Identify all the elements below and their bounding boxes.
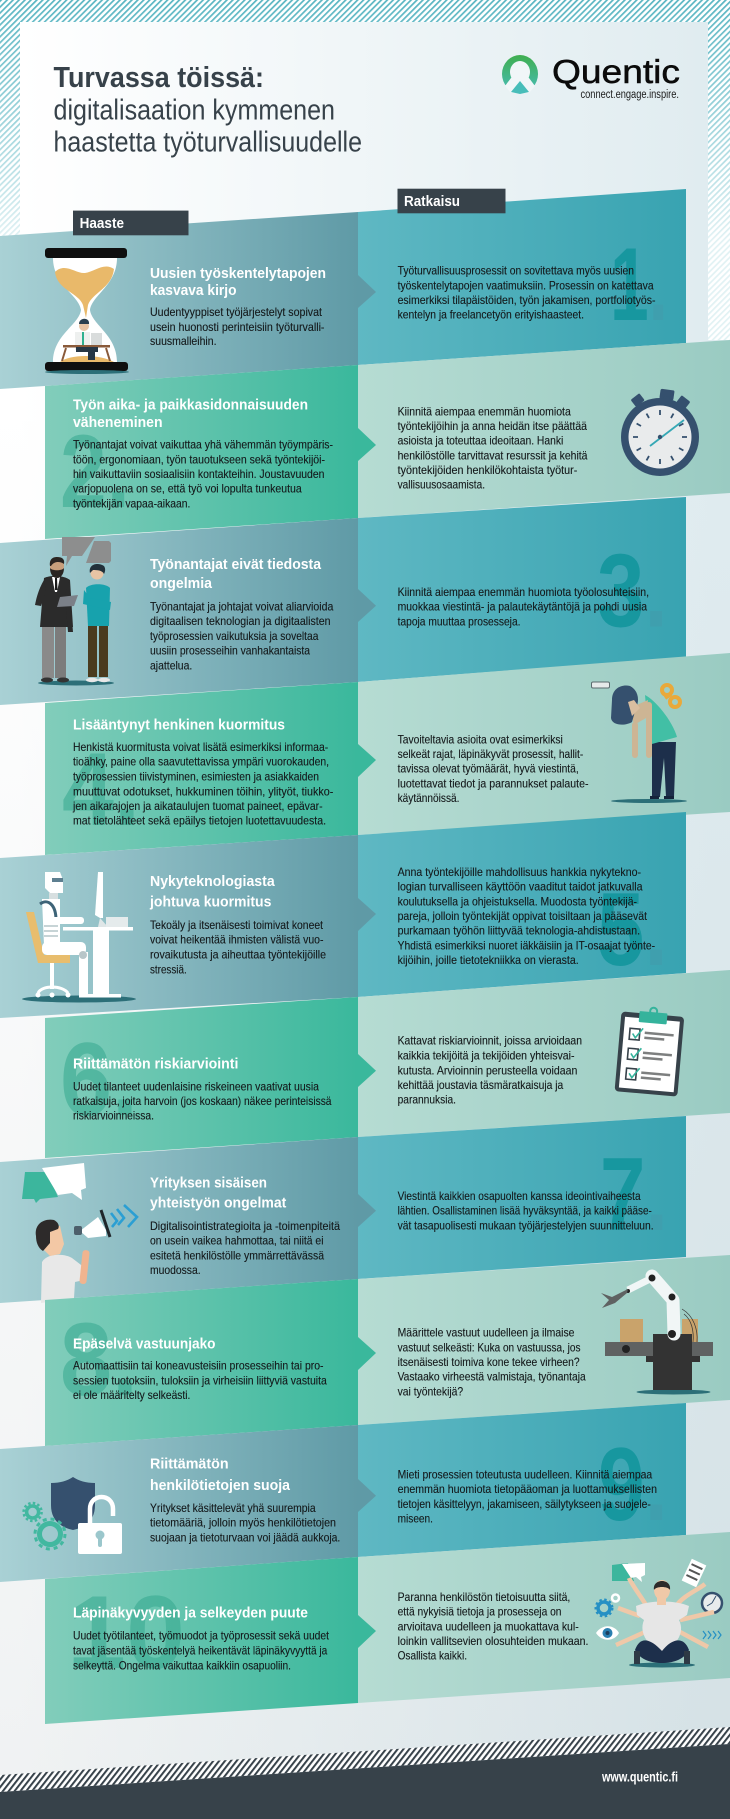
text: solution 7: Viestintä kaikkien osapuolten kanssa ideointivaiheesta: [398, 1189, 641, 1203]
text: challenge 10: Uudet työtilanteet, työmuodot ja työprosessit sekä uudet: [73, 1628, 330, 1642]
number 6: 6.: [60, 1022, 138, 1138]
text: solution 9: Mieti prosessien toteutusta uudelleen. Kiinnitä aiempaa: [398, 1467, 652, 1481]
icon: robot at desk: [22, 872, 136, 1002]
text: challenge 7: [150, 1219, 340, 1277]
text: solution 7: lähtien. Osallistaminen lisää hyväksyntää, ja kaikki pääse-: [398, 1204, 652, 1218]
text: solution 1: Työturvallisuusprosessit on sovitettava myös uusien: [398, 264, 634, 278]
row 8: [45, 1255, 730, 1446]
text: solution 4: tavissa olevat työmäärät, hyvä viestintä,: [398, 762, 579, 776]
heading: challenge 9: henkilötietojen suoja: [150, 1478, 291, 1494]
text: solution 6: parannuksia.: [398, 1093, 456, 1107]
icon: stopwatch: [621, 389, 699, 476]
text: challenge 3: digitaalisen teknologian ja digitaalisten: [150, 614, 330, 628]
title: digitalisaation kymmenen: [54, 94, 335, 126]
text: solution 9: enemmän huomiota tietopääoman ja luottamuksellisten: [398, 1482, 657, 1496]
heading: challenge 1: Uusien työskentelytapojen: [150, 266, 326, 282]
text: challenge 4: työprosessien tiivistyminen, esimiesten ja asiakkaiden: [73, 770, 319, 784]
text: solution 10: Osallista kaikki.: [398, 1649, 467, 1663]
heading: challenge 9: [150, 1456, 291, 1494]
text: challenge 7: Digitalisointistrategioita ja -toimenpiteitä: [150, 1219, 340, 1233]
text: solution 10: Paranna henkilöstön tietoisuutta siitä,: [398, 1590, 570, 1604]
logo: Quentic: Quentic: [552, 53, 680, 90]
text: challenge 5: [150, 918, 326, 976]
text: challenge 8: Automaattisiin tai koneavusteisiin prosesseihin tai pro-: [73, 1359, 324, 1373]
number 8: 8.: [60, 1302, 138, 1418]
text: solution 7: vät tasapuolisesti mukaan työjärjestelyjen suunnitteluun.: [398, 1218, 654, 1232]
row 10: [45, 1532, 730, 1724]
number 1: 1.: [610, 227, 668, 343]
number 9: 9.: [598, 1427, 668, 1543]
title: haastetta työturvallisuudelle: [54, 127, 362, 159]
text: solution 5: logian turvalliseen käyttöön vaaditut taidot jatkuvalla: [398, 880, 643, 894]
text: challenge 2: [73, 438, 333, 510]
text: solution 1: esimerkiksi tilapäistöiden, työn jakamisen, portfoliotyös-: [398, 293, 656, 307]
text: challenge 2: työntekijän vapaa-aikaan.: [73, 496, 190, 510]
text: solution 6: kutusta. Arvioinnin perusteella voidaan: [398, 1063, 577, 1077]
text: challenge 2: töön, ergonomiaan, työn tauotukseen sekä työntekijöi-: [73, 452, 325, 466]
text: solution 6: kaikkia tekijöitä ja tekijöiden yhteisvai-: [398, 1049, 574, 1063]
icon: person with megaphone: [22, 1163, 137, 1303]
footer: [0, 1727, 730, 1819]
text: challenge 4: jen aikarajojen ja aikataulujen tuomat paineet, epävar-: [72, 799, 323, 813]
text: solution 2: henkilöstölle tarvittavat resurssit ja kehitä: [398, 448, 588, 462]
text: challenge 1: suusmalleihin.: [150, 334, 216, 348]
text: solution 2: työntekijöiden henkilökohtaista työtur-: [398, 463, 577, 477]
text: challenge 9: Yritykset käsittelevät yhä suurempia: [150, 1501, 316, 1515]
text: solution 1: työskentelytapojen vaatimuksiin. Prosessin on katettava: [398, 278, 654, 292]
text: solution 5: pareja, jolloin työntekijät oppivat toisiltaan ja pääsevät: [398, 909, 648, 923]
text: solution 8: vai työntekijä?: [398, 1384, 463, 1398]
text: challenge 8: [73, 1359, 327, 1402]
text: challenge 3: työprosessien vaikutuksia ja soveltaa: [150, 629, 319, 643]
text: challenge 9: tietomääriä, jolloin myös henkilötietojen: [150, 1516, 336, 1530]
text: challenge 4: [72, 740, 333, 828]
text: solution 6: [398, 1034, 582, 1107]
text: challenge 2: hin vaikuttaviin sosiaalisiin kontakteihin. Joustavuuden: [73, 467, 324, 481]
text: challenge 6: [73, 1079, 332, 1123]
icon: hourglass: [45, 248, 129, 374]
row 5: [0, 812, 686, 1018]
text: solution 6: Kattavat riskiarvioinnit, joissa arvioidaan: [398, 1034, 582, 1048]
icon: two people talking: [35, 537, 114, 686]
text: solution 3: tapoja muuttaa prosesseja.: [398, 615, 520, 629]
text: challenge 5: Tekoäly ja itsenäisesti toimivat koneet: [150, 918, 324, 932]
heading: challenge 2: [73, 397, 308, 431]
row 2: [45, 340, 730, 539]
row 9: [0, 1403, 686, 1582]
icon: robot arm: [601, 1274, 713, 1394]
text: solution 3: Kiinnitä aiempaa enemmän huomiota työolosuhteisiin,: [398, 585, 649, 599]
text: solution 5: kijöihin, joille tietotekniikka on vierasta.: [398, 953, 579, 967]
heading: challenge 2: väheneminen: [73, 415, 162, 431]
text: challenge 1: [150, 305, 324, 348]
icon: clipboard: [615, 1005, 685, 1097]
text: solution 10: loinkin vallitsevien olosuhteiden mukaan.: [398, 1634, 588, 1648]
heading: challenge 7: yhteistyön ongelmat: [150, 1196, 286, 1212]
text: solution 2: vallisuusosaamista.: [398, 478, 485, 492]
row 4: [45, 653, 730, 855]
text: challenge 7: esitetä henkilöstölle ymmärrettävässä: [150, 1248, 324, 1262]
heading: challenge 10: Läpinäkyvyyden ja selkeyden puute: [73, 1606, 308, 1622]
heading: challenge 4: Lisääntynyt henkinen kuormitus: [73, 717, 285, 733]
text: challenge 4: Henkistä kuormitusta voivat lisätä esimerkiksi informaa-: [73, 740, 328, 754]
text: challenge 7: muodossa.: [150, 1263, 201, 1277]
text: challenge 3: ajattelua.: [150, 658, 192, 672]
text: solution 8: vastuut selkeästi: Kuka on vastuussa, jos: [398, 1340, 580, 1354]
text: solution 5: koulutuksella ja ohjeistuksella. Muodosta työntekijä-: [398, 894, 637, 908]
text: solution 1: [398, 264, 656, 322]
text: challenge 4: muuttuvat odotukset, hukkuminen töihin, ylityöt, tiukko-: [73, 784, 333, 798]
text: solution 4: [398, 732, 588, 805]
icon: shield, padlock and gears: [24, 1477, 122, 1554]
number 3: 3.: [597, 534, 668, 650]
number 4: 4.: [62, 732, 140, 848]
footer url: www.quentic.fi: [601, 1769, 678, 1785]
text: solution 4: Tavoiteltavia asioita ovat esimerkiksi: [398, 732, 563, 746]
text: solution 9: [398, 1467, 657, 1526]
title: Turvassa töissä:: [54, 62, 264, 94]
number 5: 5.: [597, 872, 668, 988]
text: challenge 4: mat tietolähteet sekä epäilys tietojen luotettavuudesta.: [73, 814, 326, 828]
logo: Quentic: connect.engage.inspire.: [580, 89, 679, 101]
number 7: 7.: [600, 1137, 668, 1253]
heading: challenge 3: Työnantajat eivät tiedosta: [150, 557, 322, 573]
text: challenge 6: ratkaisuja, joita harvoin (jos koskaan) näkee perinteisissä: [73, 1094, 332, 1108]
text: challenge 5: voivat heikentää ihmisten välistä vuo-: [150, 933, 324, 947]
text: solution 5: Yhdistä esimerkiksi nuoret iäkkäisiin ja IT-osaajat työnte-: [398, 938, 655, 952]
row 1: [0, 189, 686, 389]
heading: challenge 1: [150, 266, 326, 299]
text: solution 3: [398, 585, 649, 629]
text: solution 8: Määrittele vastuut uudelleen ja ilmaise: [398, 1326, 575, 1340]
text: solution 4: luotettavat tiedot ja parannukset palaute-: [398, 776, 588, 790]
text: challenge 10: selkeyttä. Ongelma vaikuttaa kaikkiin osapuoliin.: [73, 1658, 291, 1672]
heading: challenge 8: Epäselvä vastuunjako: [73, 1336, 216, 1352]
text: solution 5: purkamaan työhön liittyvää teknologia-ahdistustaan.: [398, 924, 640, 938]
text: challenge 4: tioähky, paine olla saavutettavissa ympäri vuorokauden,: [73, 755, 329, 769]
text: solution 2: työntekijöihin ja anna heidän itse päättää: [398, 419, 587, 433]
icon: exhausted woman: [592, 682, 687, 803]
text: solution 6: kehittää joustavia täsmäratkaisuja ja: [398, 1078, 564, 1092]
text: challenge 10: tavat jäsentää työskentelyä heikentävät läpinäkyvyyttä ja: [73, 1643, 328, 1657]
text: challenge 5: rovaikutusta ja aiheuttaa työntekijöille: [150, 947, 326, 961]
text: solution 8: Vastaako virheestä valmistaja, työnantaja: [398, 1370, 586, 1384]
heading: challenge 3: [150, 557, 322, 592]
text: solution 5: [398, 865, 655, 967]
text: challenge 6: riskiarvioinneissa.: [73, 1109, 154, 1123]
text: solution 8: itsenäisesti toimiva kone tekee virheen?: [398, 1355, 580, 1369]
text: solution 8: [398, 1326, 586, 1398]
row 6: [45, 970, 730, 1158]
tag: Haaste: [73, 211, 188, 235]
heading: challenge 5: Nykyteknologiasta: [150, 874, 276, 890]
text: solution 2: Kiinnitä aiempaa enemmän huomiota: [398, 404, 571, 418]
text: solution 10: [398, 1590, 588, 1663]
text: challenge 3: [150, 599, 334, 672]
text: solution 1: kentelyn ja freelancetyön erityishaasteet.: [398, 308, 584, 322]
text: solution 5: Anna työntekijöille mahdollisuus hankkia nykytekno-: [398, 865, 641, 879]
row 3: [0, 497, 686, 705]
text: solution 9: miseen.: [398, 1512, 433, 1526]
background hatching: [0, 0, 730, 345]
text: challenge 8: sessien tuotoksiin, tuloksiin ja virheisiin liittyviä vastuita: [73, 1373, 327, 1387]
heading: challenge 7: [150, 1175, 286, 1212]
text: challenge 9: [150, 1501, 340, 1545]
text: solution 10: että nykyisiä tietoja ja prosesseja on: [398, 1605, 562, 1619]
text: solution 10: arvioitava uudelleen ja muokattava kul-: [398, 1619, 579, 1633]
number 2: 2.: [60, 414, 130, 530]
text: solution 2: [398, 404, 588, 492]
heading: challenge 9: Riittämätön: [150, 1456, 229, 1472]
row 7: [0, 1116, 686, 1303]
text: solution 7: [398, 1189, 654, 1232]
tag: Haaste: Haaste: [80, 216, 124, 232]
text: challenge 3: uusiin prosesseihin vanhakantaista: [150, 643, 310, 657]
text: challenge 2: varjopuolena on se, että työ voi lopulta tunkeutua: [73, 482, 302, 496]
heading: challenge 6: Riittämätön riskiarviointi: [73, 1056, 238, 1072]
text: solution 2: asioista ja toteuttaa ideoitaan. Hanki: [398, 434, 563, 448]
heading: challenge 5: johtuva kuormitus: [149, 895, 271, 911]
text: solution 9: tietojen käsittelyyn, jakamiseen, säilytykseen ja suojele-: [398, 1497, 651, 1511]
text: challenge 6: Uudet tilanteet uudenlaisine riskeineen vaativat uusia: [73, 1079, 319, 1093]
text: challenge 10: [73, 1628, 330, 1672]
text: challenge 3: Työnantajat ja johtajat voivat aliarvioida: [150, 599, 334, 613]
number 10: 10: [67, 1575, 185, 1691]
tag: Ratkaisu: [398, 189, 506, 213]
title: [54, 62, 362, 159]
text: solution 4: käytännöissä.: [398, 791, 460, 805]
heading: challenge 1: kasvava kirjo: [150, 283, 237, 299]
text: challenge 8: ei ole määritelty selkeästi.: [73, 1388, 190, 1402]
heading: challenge 7: Yrityksen sisäisen: [150, 1175, 267, 1191]
text: challenge 7: on usein vaikea hahmottaa, tai niitä ei: [150, 1234, 324, 1248]
heading: challenge 3: ongelmia: [150, 576, 213, 592]
icon: multitasking person: [596, 1559, 722, 1668]
text: solution 3: muokkaa viestintä- ja palautekäytäntöjä ja pohdi uusia: [398, 600, 647, 614]
heading: challenge 5: [149, 874, 276, 911]
logo: Quentic: [502, 53, 680, 101]
text: solution 4: selkeät rajat, läpinäkyvät prosessit, hallit-: [398, 747, 583, 761]
text: challenge 9: suojaan ja tietoturvaan voi jäädä aukkoja.: [150, 1531, 340, 1545]
text: challenge 1: Uudentyyppiset työjärjestelyt sopivat: [150, 305, 323, 319]
heading: challenge 2: Työn aika- ja paikkasidonnaisuuden: [73, 397, 308, 413]
text: challenge 5: stressiä.: [150, 962, 187, 976]
text: challenge 2: Työnantajat voivat vaikuttaa yhä vähemmän työympäris-: [73, 438, 333, 452]
tag: Ratkaisu: Ratkaisu: [404, 194, 460, 210]
text: challenge 1: usein huonosti perinteisiin työturvalli-: [150, 320, 324, 334]
